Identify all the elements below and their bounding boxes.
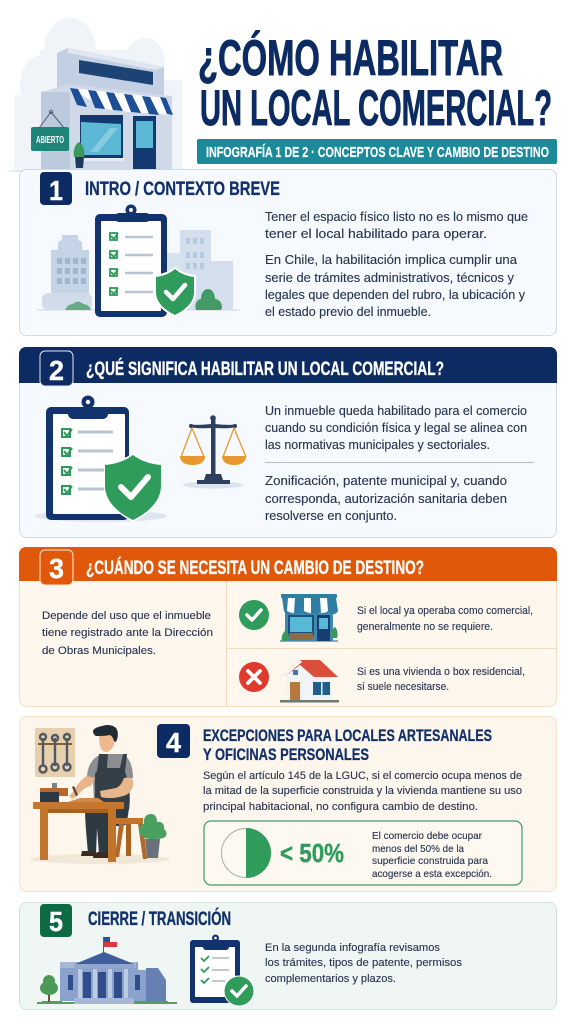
text block 3 (42, 610, 213, 657)
text block 1: legales que dependen del rubro, la ubicación y (265, 288, 526, 302)
badge 3: 3 (49, 553, 64, 584)
badge 1: 1 (49, 175, 63, 206)
text block 1: el estado previo del inmueble. (265, 305, 431, 319)
callout text: superficie construida para (372, 855, 488, 867)
badge 4: 4 (166, 727, 181, 758)
text: residential case: Si es una vivienda o box residencial, (357, 666, 525, 678)
legs (85, 808, 129, 854)
illustration: government building (37, 937, 177, 1004)
text block 4: principal habitacional, no configura cambio de destino. (203, 801, 478, 813)
half circle chart (222, 828, 271, 878)
text block 2: cuando su condición física y legal se alinea con (265, 421, 527, 435)
text block 4: Según el artículo 145 de la LGUC, si el comercio ocupa menos de (203, 770, 522, 782)
text: commercial case: Si el local ya operaba como comercial, (357, 605, 533, 617)
text block 5: En la segunda infografía revisamos (265, 942, 441, 954)
panel 3: change of use (19, 547, 557, 707)
icon: scales (180, 415, 246, 488)
text block 1 (265, 210, 528, 319)
illustration: artisan at workbench (30, 725, 170, 864)
text block 1: tener el local habilitado para operar. (265, 227, 487, 241)
text block 4 (203, 770, 522, 813)
heading 5: CIERRE / TRANSICIÓN (88, 908, 231, 930)
text block 4: la mitad de la superficie construida y la vivienda mantiene su uso (203, 785, 522, 797)
text block 3: tiene registrado ante la Dirección (42, 627, 213, 639)
badge 2 (40, 351, 73, 386)
text: commercial case: generalmente no se requiere. (357, 621, 493, 633)
heading 3: ¿CUÁNDO SE NECESITA UN CAMBIO DE DESTINO? (86, 557, 424, 579)
icon: house (280, 660, 339, 702)
text block 2: las normativas municipales y sectoriales. (265, 438, 490, 452)
icon: small store (280, 594, 338, 642)
icon: red cross (239, 662, 269, 692)
heading 2: ¿QUÉ SIGNIFICA HABILITAR UN LOCAL COMERCIAL? (86, 358, 444, 380)
panel 5: closing (20, 902, 556, 1010)
text: residential case: sí suele necesitarse. (357, 681, 449, 693)
text: residential case (357, 666, 525, 693)
illustration: clipboard and city (37, 204, 240, 317)
panel 4: exceptions (20, 716, 556, 892)
icon: clipboard with check (190, 934, 254, 1006)
heading 4 (203, 726, 492, 764)
subtitle ribbon (197, 139, 557, 164)
text block 2: Un inmueble queda habilitado para el comercio (265, 404, 527, 418)
text: commercial case (357, 605, 533, 633)
illustration: clipboard and shield (35, 396, 167, 522)
icon: green check (239, 600, 269, 630)
badge 5 (40, 904, 72, 937)
badge 5: 5 (49, 906, 63, 937)
callout text: acogerse a esta excepción. (372, 868, 492, 880)
value: < 50% (280, 838, 344, 868)
badge 2: 2 (49, 355, 64, 386)
text block 3: de Obras Municipales. (42, 645, 156, 657)
badge 3 (40, 550, 73, 585)
text block 2: corresponda, autorización sanitaria deben (265, 492, 507, 506)
callout: under 50 percent (204, 821, 522, 885)
panel 1: intro (20, 170, 556, 336)
heading 4: Y OFICINAS PERSONALES (203, 745, 369, 764)
text block 2 (265, 404, 534, 523)
text block 2: resolverse en conjunto. (265, 509, 397, 523)
badge 1 (40, 172, 72, 206)
badge 4 (157, 724, 190, 758)
callout text: menos del 50% de la (372, 843, 464, 855)
text block 5: los trámites, tipos de patente, permisos (265, 957, 463, 969)
text block 1: En Chile, la habilitación implica cumplir una (265, 253, 517, 267)
text block 1: Tener el espacio físico listo no es lo mismo que (265, 210, 528, 224)
text block 1: serie de trámites administrativos, técnicos y (265, 271, 515, 285)
panel 2: definition (19, 347, 557, 538)
callout text (372, 830, 492, 880)
text block 5: complementarios y plazos. (265, 973, 396, 985)
header illustration: storefront (6, 18, 190, 173)
heading 1: INTRO / CONTEXTO BREVE (85, 179, 280, 200)
callout text: El comercio debe ocupar (372, 830, 482, 842)
title (198, 30, 552, 136)
text block 2: Zonificación, patente municipal y, cuando (265, 474, 507, 488)
text block 5 (265, 942, 463, 985)
text block 3: Depende del uso que el inmueble (42, 610, 211, 622)
sign text: abierto: ABIERTO (36, 135, 64, 146)
